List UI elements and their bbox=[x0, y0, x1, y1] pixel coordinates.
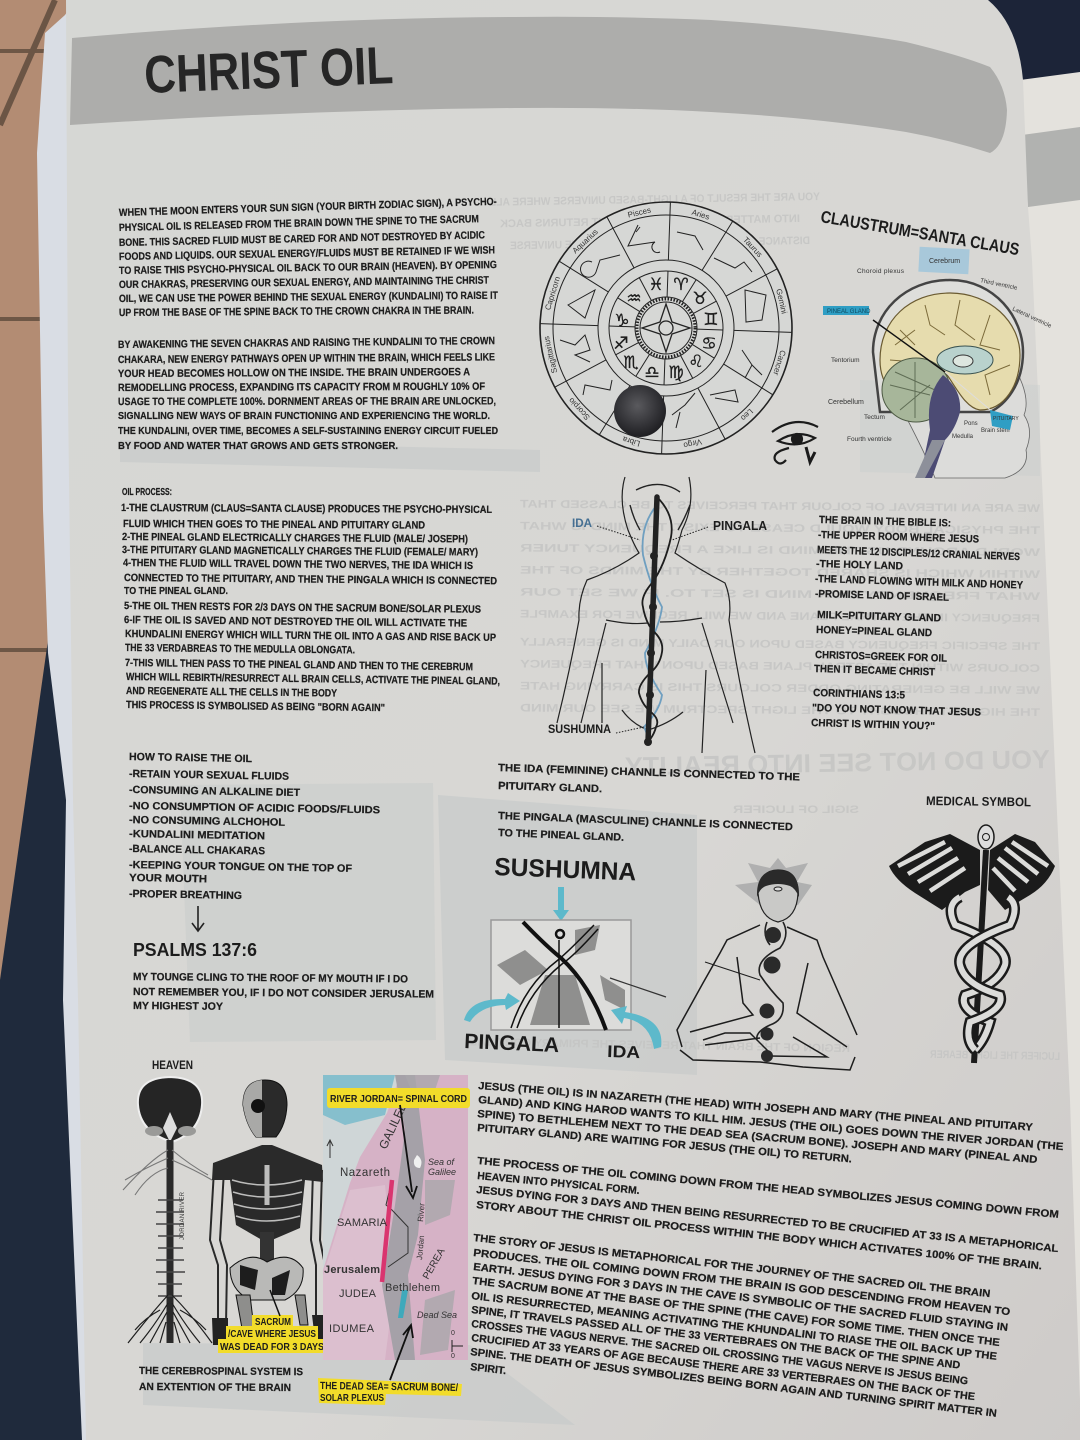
text block: awakening the chakras: BY FOOD AND WATER THAT GROWS AND GETS STRONGER. bbox=[118, 440, 398, 452]
inner ventricles bbox=[937, 346, 993, 374]
sign names: Gemini bbox=[774, 288, 789, 315]
text block: how to raise the oil: -NO CONSUMPTION OF ACIDIC FOODS/FLUIDS bbox=[129, 800, 380, 816]
next page behind bbox=[1020, 72, 1080, 1440]
text block: brain in the bible: MILK=PITUITARY GLAND bbox=[817, 609, 942, 624]
text block: oil process: CONNECTED TO THE PITUITARY, AND THEN THE PINGALA WHICH IS CONNECTED bbox=[124, 572, 497, 587]
text block: oil process: OIL PROCESS: bbox=[122, 486, 172, 498]
sign names: Virgo bbox=[682, 437, 703, 450]
head profile bbox=[875, 360, 1030, 478]
skull bbox=[873, 280, 1023, 412]
wheel spokes bbox=[540, 202, 792, 454]
brain labels: Medulla bbox=[952, 434, 974, 440]
text block: brain in the bible: CORINTHIANS 13:5 bbox=[813, 687, 905, 702]
zodiac glyphs: ♍ bbox=[668, 363, 684, 383]
icon: teal curved arrow right bbox=[611, 1006, 661, 1049]
text: cerebrospinal caption: AN EXTENTION OF THE BRAIN bbox=[139, 1381, 291, 1394]
sushumna channel bbox=[648, 497, 657, 742]
text: cerebrospinal caption bbox=[139, 1365, 303, 1394]
chakra circles bbox=[760, 928, 780, 1062]
text: WORLD AROUND US THE MIND IS LIKE A FREQUENCY TUNER bbox=[520, 542, 1040, 559]
side nerves bbox=[156, 1200, 185, 1296]
body lines bbox=[677, 925, 857, 1070]
text block: psalms quote: NOT REMEMBER YOU, IF I DO NOT CONSIDER JERUSALEM bbox=[133, 986, 434, 1001]
text block: brain in the bible: -THE LAND FLOWING WITH MILK AND HONEY bbox=[815, 573, 1023, 592]
place names: 0 bbox=[451, 1330, 455, 1337]
place names: Jerusalem bbox=[324, 1264, 380, 1276]
pingala channel bbox=[639, 497, 672, 742]
callout: sacrum bbox=[218, 1290, 326, 1353]
brain labels: Third ventricle bbox=[980, 278, 1018, 292]
brain labels: Fourth ventricle bbox=[847, 436, 892, 443]
text block: oil process: AND REGENERATE ALL THE CELLS IN THE BODY bbox=[126, 685, 337, 700]
text block: brain in the bible: -THE UPPER ROOM WHERE JESUS bbox=[818, 529, 979, 545]
text block: oil process: FLUID WHICH THEN GOES TO THE PINEAL AND PITUITARY GLAND bbox=[123, 518, 425, 532]
callout: dead sea: SOLAR PLEXUS bbox=[320, 1392, 384, 1404]
text block: story of jesus: SPINE, IT TRAVELS PASSED ALL OF THE 33 VERTEBRAES ON THE BACK OF THE SPINE AND bbox=[471, 1304, 961, 1372]
heading: psalms: PSALMS 137:6 bbox=[133, 940, 257, 960]
label: sushumna: SUSHUMNA bbox=[548, 722, 611, 736]
text block: moon and sun sign bbox=[119, 196, 498, 319]
text block: psalms quote: MY TOUNGE CLING TO THE ROOF OF MY MOUTH IF I DO bbox=[133, 971, 408, 985]
text block: story of jesus: CRUCIFIED AT 33 YEARS OF AGE BECAUSE THERE ARE 33 VERTEBRAES ON THE BACK OF THE bbox=[471, 1332, 976, 1403]
text block: story of jesus: EARTH. JESUS DYING FOR 3 DAYS IN THE CAVE IS SYMBOLIC OF THE SACRED FLUID STAYING IN bbox=[473, 1261, 1009, 1334]
brain stem bbox=[920, 375, 960, 478]
text block: oil process: 6-IF THE OIL IS SAVED AND NOT DESTROYED THE OIL WILL ACTIVATE THE bbox=[124, 614, 467, 630]
text block: how to raise the oil: YOUR MOUTH bbox=[129, 872, 207, 885]
title: CHRIST OIL bbox=[143, 36, 394, 105]
sign names: Scorpio bbox=[566, 395, 592, 422]
label: ida: IDA bbox=[572, 516, 592, 530]
text block: ida and pingala connections: PITUITARY GLAND. bbox=[498, 780, 602, 795]
text block: moon and sun sign: BONE. THIS SACRED FLUID MUST BE CARED FOR AND NOT DESTROYED BY ACIDIC bbox=[119, 229, 485, 249]
spinal cord bbox=[166, 1140, 174, 1343]
text block: moon and sun sign: OIL, WE CAN USE THE POWER BEHIND THE SEXUAL ENERGY (KUNDALINI) TO RAISE IT bbox=[119, 290, 498, 305]
text block: story of jesus: SPINE. THE DEATH OF JESUS SYMBOLIZES BEING BORN AGAIN AND TURNING SPIRIT MATTER IN bbox=[470, 1346, 997, 1420]
place names: River bbox=[416, 1202, 427, 1222]
text block: moon and sun sign: FOODS AND LIQUIDS. OUR SEXUAL ENERGY/FLUIDS MUST BE RETAINED IF WE WISH bbox=[119, 244, 495, 263]
zodiac glyphs: ♉ bbox=[692, 289, 708, 309]
energy channel bbox=[757, 922, 786, 1040]
arrow: down to psalms bbox=[192, 906, 204, 931]
black route bbox=[386, 1180, 408, 1267]
text block: brain in the bible: HONEY=PINEAL GLAND bbox=[816, 624, 933, 639]
text block: oil process: 1-THE CLAUSTRUM (CLAUS=SANTA CLAUSE) PRODUCES THE PSYCHO-PHYSICAL bbox=[121, 502, 493, 516]
brain mass bbox=[138, 1077, 202, 1142]
place names bbox=[324, 1100, 463, 1360]
sea bbox=[323, 1075, 468, 1360]
brain labels: Choroid plexus bbox=[857, 268, 905, 275]
text block: brain in the bible: -PROMISE LAND OF ISRAEL bbox=[815, 588, 950, 604]
text block: how to raise the oil: -CONSUMING AN ALKALINE DIET bbox=[129, 784, 301, 799]
left wing bbox=[889, 834, 980, 910]
text block: brain in the bible: MEETS THE 12 DISCIPLES/12 CRANIAL NERVES bbox=[817, 544, 1020, 563]
zodiac glyphs bbox=[613, 275, 719, 383]
brain labels: PITUITARY bbox=[993, 416, 1019, 422]
sign names: Pisces bbox=[627, 206, 652, 220]
place names: Nazareth bbox=[340, 1167, 390, 1179]
pink route bbox=[382, 1180, 392, 1282]
text block: moon and sun sign: TO RAISE THIS PSYCHO-PHYSICAL OIL BACK TO OUR BRAIN (HEAVEN). BY OPENING bbox=[119, 259, 497, 277]
text block: oil process: WHICH WILL REBIRTH/RESURRECT ALL BRAIN CELLS, ACTIVATE THE PINEAL GLAND, bbox=[126, 671, 500, 688]
text block: awakening the chakras: BY AWAKENING THE SEVEN CHAKRAS AND RAISING THE KUNDALINI TO THE CROWN bbox=[118, 335, 495, 351]
place names: GALILEE bbox=[376, 1100, 410, 1151]
text: WE ARE AN INTERVAL OF COLOUR THAT PERCEIVES TO BE CLASSED THAT bbox=[520, 498, 1040, 515]
pineal line bbox=[873, 320, 945, 372]
text block: how to raise the oil: -RETAIN YOUR SEXUAL FLUIDS bbox=[129, 768, 289, 783]
ida channel bbox=[643, 505, 662, 742]
label: pingala: PINGALA bbox=[464, 1030, 560, 1057]
text block: oil process: KHUNDALINI ENERGY WHICH WILL TURN THE OIL INTO A GAS AND RISE BACK UP bbox=[125, 628, 496, 644]
text block: oil process: 5-THE OIL THEN RESTS FOR 2/3 DAYS ON THE SACRUM BONE/SOLAR PLEXUS bbox=[124, 600, 481, 616]
text: THE SPECIFIC FREQUENCY BASED UPON OUR DAILY MIND IS GENERALLY bbox=[519, 636, 1040, 653]
text block: awakening the chakras bbox=[118, 335, 498, 452]
text block: process of the oil bbox=[476, 1155, 1060, 1272]
place names: Galilee bbox=[428, 1167, 456, 1177]
brain labels: Lateral ventricle bbox=[1011, 306, 1053, 330]
text block: ida and pingala connections: THE IDA (FEMININE) CHANNLE IS CONNECTED TO THE bbox=[498, 762, 800, 783]
text block: awakening the chakras: YOUR HEAD BECOMES HOLLOW ON THE INSIDE. THE BRAIN UNDERGOES A bbox=[118, 366, 470, 380]
text: SIGIL OF LUCIFER bbox=[733, 804, 859, 816]
heading: claustrum: CLAUSTRUM=SANTA CLAUS bbox=[819, 207, 1021, 259]
callout: sacrum: /CAVE WHERE JESUS bbox=[228, 1329, 316, 1340]
sign names: Cancer bbox=[771, 349, 787, 377]
body outline bbox=[557, 477, 755, 753]
place names: 0 bbox=[451, 1353, 455, 1360]
spine column bbox=[260, 1232, 274, 1268]
text block: brain in the bible: THEN IT BECAME CHRIST bbox=[814, 663, 936, 678]
text: REGION OF THE BRAIN THAT RECEIVES THE PRIMARY CORTICAL bbox=[470, 1036, 850, 1055]
text block: moon and sun sign: PHYSICAL OIL IS RELEASED FROM THE BRAIN DOWN THE SPINE TO THE SACRUM bbox=[119, 213, 479, 234]
pelvis bbox=[230, 1257, 303, 1300]
text block: brain in the bible: "DO YOU NOT KNOW THAT JESUS bbox=[812, 702, 981, 719]
heading: sushumna: SUSHUMNA bbox=[494, 853, 637, 886]
place names: Bethlehem bbox=[385, 1282, 440, 1294]
place names: Sea of bbox=[428, 1157, 456, 1167]
text block: jesus the oil: SPINE) TO BETHLEHEM NEXT TO THE DEAD SEA (SACRUM BONE). JOSEPH AND MARY (PINEAL AND bbox=[477, 1108, 1038, 1166]
text block: brain in the bible: CHRISTOS=GREEK FOR OIL bbox=[815, 649, 948, 665]
text: cerebrospinal caption: THE CEREBROSPINAL SYSTEM IS bbox=[139, 1365, 303, 1378]
sign names: Aries bbox=[691, 208, 711, 222]
text block: awakening the chakras: REMODELLING PROCESS, EXPANDING ITS CAPACITY FROM M ROUGHLY 10% OF bbox=[118, 381, 486, 394]
header band bbox=[70, 17, 1007, 153]
text block: ida and pingala connections: TO THE PINEAL GLAND. bbox=[498, 827, 624, 844]
skeleton illustration bbox=[210, 1080, 326, 1345]
sign names: Capricorn bbox=[543, 275, 562, 311]
place names: Dead Sea bbox=[417, 1310, 457, 1320]
place names: IDUMEA bbox=[329, 1323, 375, 1335]
text block: process of the oil: JESUS DYING FOR 3 DAYS AND THEN BEING RESURRECTED TO BE CRUCIFIED AT 33 IS A METAPHORICAL bbox=[476, 1184, 1060, 1255]
text: INTO MATTER, HIGH-VIBRATION LIGHT RETURNS BACK bbox=[500, 213, 800, 230]
icon: teal arrow down bbox=[553, 887, 569, 921]
label: pingala: PINGALA bbox=[713, 519, 767, 533]
text block: moon and sun sign: UP FROM THE BASE OF THE SPINE BACK TO THE CROWN CHAKRA IN THE BRAIN. bbox=[119, 305, 474, 319]
text block: oil process: THE 33 VERDABREAS TO THE MEDULLA OBLONGATA. bbox=[125, 642, 355, 656]
moon bbox=[614, 385, 666, 437]
body figure with energy channels bbox=[548, 477, 767, 753]
constellations bbox=[560, 225, 766, 428]
text block: story of jesus: CROSSES THE VAGUS NERVE. THE SACRED OIL CROSSING THE VAGUS NERVE IS JESUS BEING bbox=[471, 1318, 969, 1387]
zodiac wheel bbox=[540, 202, 792, 454]
place names: Jordan bbox=[415, 1235, 426, 1260]
text block: story of jesus: OIL IS RESURRECTED, MEANING ACTIVATING THE KHUNDALINI TO RIASE THE OIL BACK UP THE bbox=[471, 1290, 998, 1363]
meditating figure with chakras bbox=[677, 858, 857, 1070]
text: WE WILL BE GENERATING ODDER COLOURS THIS IS CARRYING HATE bbox=[520, 680, 1040, 697]
nadi crossing diagram bbox=[491, 920, 666, 1030]
brain labels: Cerebrum bbox=[929, 258, 960, 265]
text block: how to raise the oil: -NO CONSUMING ALCHOHOL bbox=[129, 814, 286, 829]
zodiac glyphs: ♌ bbox=[688, 352, 704, 372]
zodiac glyphs: ♈ bbox=[673, 275, 689, 295]
callout: dead sea: THE DEAD SEA= SACRUM BONE/ bbox=[320, 1380, 458, 1394]
text block: how to raise the oil: HOW TO RAISE THE OIL bbox=[129, 751, 253, 765]
sign names: Sagittarius bbox=[542, 335, 559, 374]
map of holy land bbox=[323, 1075, 468, 1360]
heading: medical symbol: MEDICAL SYMBOL bbox=[926, 794, 1031, 809]
text block: process of the oil: STORY ABOUT THE CHRIST OIL PROCESS WITHIN THE BODY WHICH ACTIVATES 100% OF THE BRAIN. bbox=[476, 1199, 1043, 1272]
text block: oil process: THIS PROCESS IS SYMBOLISED AS BEING "BORN AGAIN" bbox=[126, 699, 385, 714]
brain diagram bbox=[823, 247, 1053, 478]
text: THE HIGHEST THOUGHT TO THE LIGHT SPECTRUM WE SEE OUR MIND bbox=[520, 702, 1040, 719]
sign names bbox=[542, 206, 789, 450]
text block: how to raise the oil bbox=[129, 751, 380, 902]
text block: psalms quote: MY HIGHEST JOY bbox=[133, 1000, 223, 1013]
cerebrospinal system illustration: JORDAN RIVER bbox=[180, 1191, 186, 1240]
zodiac glyphs: ♎ bbox=[644, 363, 660, 383]
text block: how to raise the oil: -KEEPING YOUR TONGUE ON THE TOP OF bbox=[129, 859, 353, 875]
text block: story of jesus: THE SACRUM BONE AT THE BASE OF THE SPINE (THE CAVE) FOR SOME TIME. THEN ONCE THE bbox=[472, 1275, 1000, 1349]
text block: jesus the oil: PITUITARY GLAND) ARE WAITING FOR JESUS (THE OIL) TO RETURN. bbox=[477, 1122, 853, 1165]
text block: moon and sun sign: OUR CHAKRAS, PRESERVING OUR SEXUAL ENERGY, AND MAINTAINING THE CHRIST bbox=[119, 274, 489, 291]
rift valley and hills bbox=[382, 1075, 425, 1360]
zodiac glyphs: ♐ bbox=[613, 334, 629, 354]
text block: moon and sun sign: WHEN THE MOON ENTERS YOUR SUN SIGN (YOUR BIRTH ZODIAC SIGN), A PSYCHO- bbox=[119, 196, 497, 219]
place names: PEREA bbox=[421, 1246, 448, 1282]
skull bbox=[243, 1080, 287, 1137]
cerebrum bbox=[880, 293, 1020, 410]
snakes bbox=[951, 897, 1005, 1050]
text: WITHIN WHICH IS SHARED TOGETHER BY THE MINDS OF THE bbox=[520, 564, 1040, 581]
text block: ida and pingala connections: THE PINGALA (MASCULINE) CHANNLE IS CONNECTED bbox=[498, 810, 794, 833]
label: heaven: HEAVEN bbox=[152, 1060, 193, 1072]
text block: brain in the bible: -THE HOLY LAND bbox=[816, 558, 904, 572]
brain labels: PINEAL GLAND bbox=[827, 309, 871, 315]
brain labels: Pons bbox=[964, 421, 978, 427]
icon: teal curved arrow left bbox=[464, 993, 520, 1022]
staff and eye bbox=[974, 850, 986, 1063]
right wing bbox=[988, 834, 1055, 910]
central star bbox=[642, 304, 690, 352]
text: THE PHYSICAL BODY WOULD CEASE TO EXIST. THE MIND IS WHAT bbox=[520, 520, 1040, 537]
zodiac glyphs: ♒ bbox=[626, 289, 642, 309]
text: FREQUENCY IN THE ASTRAL PLANE AND WE WILL RECEIVE FOR EXAMPLE bbox=[520, 608, 1040, 625]
upper nerves bbox=[123, 1150, 212, 1195]
zodiac glyphs: ♏ bbox=[623, 353, 639, 373]
lower roots bbox=[128, 1295, 212, 1343]
brain labels: Tentorium bbox=[831, 357, 860, 364]
label: pingala bbox=[672, 519, 767, 540]
text block: brain in the bible: THE BRAIN IN THE BIBLE IS: bbox=[819, 514, 951, 529]
callout: dead sea bbox=[318, 1325, 462, 1405]
zodiac glyphs: ♑ bbox=[614, 311, 630, 331]
land bbox=[323, 1075, 468, 1360]
callout: sacrum: WAS DEAD FOR 3 DAYS bbox=[220, 1342, 324, 1353]
text block: process of the oil: HEAVEN INTO PHYSICAL FORM. bbox=[477, 1170, 640, 1197]
cerebellum bbox=[882, 358, 950, 422]
text: WHAT FREQUENCY OUR MIND IS SET TO. IF WE SET OUR bbox=[520, 586, 1040, 603]
text: DISTANCE OR BODY OF PURE LIGHT WITHIN THE UNIVERSE bbox=[510, 235, 810, 252]
text block: how to raise the oil: -KUNDALINI MEDITATION bbox=[129, 828, 265, 842]
sign names: Aquarius bbox=[571, 227, 600, 255]
sign names: Libra bbox=[621, 434, 641, 448]
cerebrospinal system illustration bbox=[123, 1077, 212, 1343]
text block: story of jesus: PRODUCES. THE OIL COMING DOWN FROM THE BRAIN IS GOD DESCENDING FROM HEAVEN TO bbox=[473, 1247, 1011, 1318]
callout: river jordan: RIVER JORDAN= SPINAL CORD bbox=[330, 1093, 467, 1105]
sign names: Taurus bbox=[741, 235, 764, 259]
brain labels: Brain stem bbox=[981, 428, 1010, 434]
zodiac glyphs: ♓ bbox=[648, 275, 664, 295]
text block: awakening the chakras: CHAKARA, NEW ENERGY PATHWAYS OPEN UP WITHIN THE BRAIN, WHICH FEELS LIKE bbox=[118, 351, 495, 366]
text: COLOURS WITHIN THE ASTRAL PLANE BASED UPON WHAT FREQUENCY bbox=[519, 658, 1040, 675]
torso bbox=[212, 1145, 323, 1240]
text block: awakening the chakras: SIGNALLING NEW WAYS OF BRAIN FUNCTIONING AND EXPERIENCING THE WORLD. bbox=[118, 410, 490, 422]
text block: awakening the chakras: THE KUNDALINI, OVER TIME, BECOMES A SELF-SUSTAINING ENERGY CIRCUIT FUELED bbox=[118, 425, 498, 437]
chakra dots bbox=[644, 552, 658, 746]
text block: oil process: TO THE PINEAL GLAND. bbox=[124, 585, 228, 597]
text block: jesus the oil: GLAND) AND KING HAROD WANTS TO KILL HIM. JESUS (THE OIL) GOES DOWN THE RIVER JORDAN (THE bbox=[478, 1094, 1064, 1153]
text block: brain in the bible bbox=[811, 514, 1023, 732]
text block: awakening the chakras: USAGE TO THE COMPLETE 100%. DORNMENT AREAS OF THE BRAIN ARE UNLOCKED, bbox=[118, 395, 496, 408]
icon: eye of horus bbox=[772, 422, 818, 464]
icon: caduceus bbox=[889, 825, 1055, 1063]
callout: sacrum: SACRUM bbox=[255, 1317, 291, 1328]
text block: brain in the bible: CHRIST IS WITHIN YOU?" bbox=[811, 717, 935, 732]
show-through panels from the reverse page bbox=[120, 380, 1040, 1425]
text block: process of the oil: THE PROCESS OF THE OIL COMING DOWN FROM THE HEAD SYMBOLIZES JESUS COMING DOWN FROM bbox=[477, 1155, 1060, 1221]
text: YOU ARE THE RESULT OF A LIGHT-BASED UNIVERSE WHERE ALL bbox=[490, 191, 820, 209]
text: YOU DO NOT SEE INTO REALITY bbox=[625, 744, 1050, 781]
text block: oil process: 2-THE PINEAL GLAND ELECTRICALLY CHARGES THE FLUID (MALE/ JOSEPH) bbox=[122, 531, 468, 545]
text block: psalms quote bbox=[133, 971, 434, 1013]
text block: story of jesus: SPIRIT. bbox=[470, 1361, 507, 1377]
page stack edge bbox=[37, 0, 95, 1440]
head bbox=[757, 870, 799, 922]
text block: story of jesus bbox=[470, 1232, 1011, 1420]
text block: jesus the oil: JESUS (THE OIL) IS IN NAZARETH (THE HEAD) WITH JOSEPH AND MARY (THE PINEAL AND PITUITARY bbox=[478, 1080, 1033, 1134]
arms bbox=[210, 1170, 325, 1325]
place names: JUDEA bbox=[339, 1288, 377, 1300]
text block: story of jesus: THE STORY OF JESUS IS METAPHORICAL FOR THE JOURNEY OF THE SACRED OIL THE BRAIN bbox=[473, 1232, 991, 1300]
text block: oil process: 4-THEN THE FLUID WILL TRAVEL DOWN THE TWO NERVES, THE IDA WHICH IS bbox=[123, 557, 473, 572]
zodiac glyphs: ♋ bbox=[701, 334, 717, 354]
zodiac glyphs: ♊ bbox=[703, 310, 719, 330]
text block: how to raise the oil: -PROPER BREATHING bbox=[129, 888, 242, 902]
text block: oil process bbox=[121, 486, 500, 714]
text block: oil process: 3-THE PITUITARY GLAND MAGNETICALLY CHARGES THE FLUID (FEMALE/ MARY) bbox=[122, 544, 478, 558]
text: LUCIFER THE LIGHT BEARER bbox=[930, 1049, 1060, 1063]
label: ida: IDA bbox=[607, 1042, 641, 1062]
femurs bbox=[236, 1295, 308, 1345]
place names: SAMARIA bbox=[337, 1217, 388, 1229]
glow bbox=[735, 858, 812, 905]
sign names: Leo bbox=[738, 407, 755, 423]
brain labels: Cerebellum bbox=[828, 399, 864, 406]
text block: jesus the oil bbox=[477, 1080, 1064, 1166]
brain labels: Tectum bbox=[864, 414, 885, 421]
text block: oil process: 7-THIS WILL THEN PASS TO THE PINEAL GLAND AND THEN TO THE CEREBRUM bbox=[125, 657, 473, 673]
callout: river jordan bbox=[327, 1088, 470, 1198]
text block: how to raise the oil: -BALANCE ALL CHAKARAS bbox=[129, 843, 265, 857]
brain labels bbox=[823, 247, 1053, 443]
text block: ida and pingala connections bbox=[498, 762, 800, 844]
label: ida bbox=[572, 516, 640, 540]
